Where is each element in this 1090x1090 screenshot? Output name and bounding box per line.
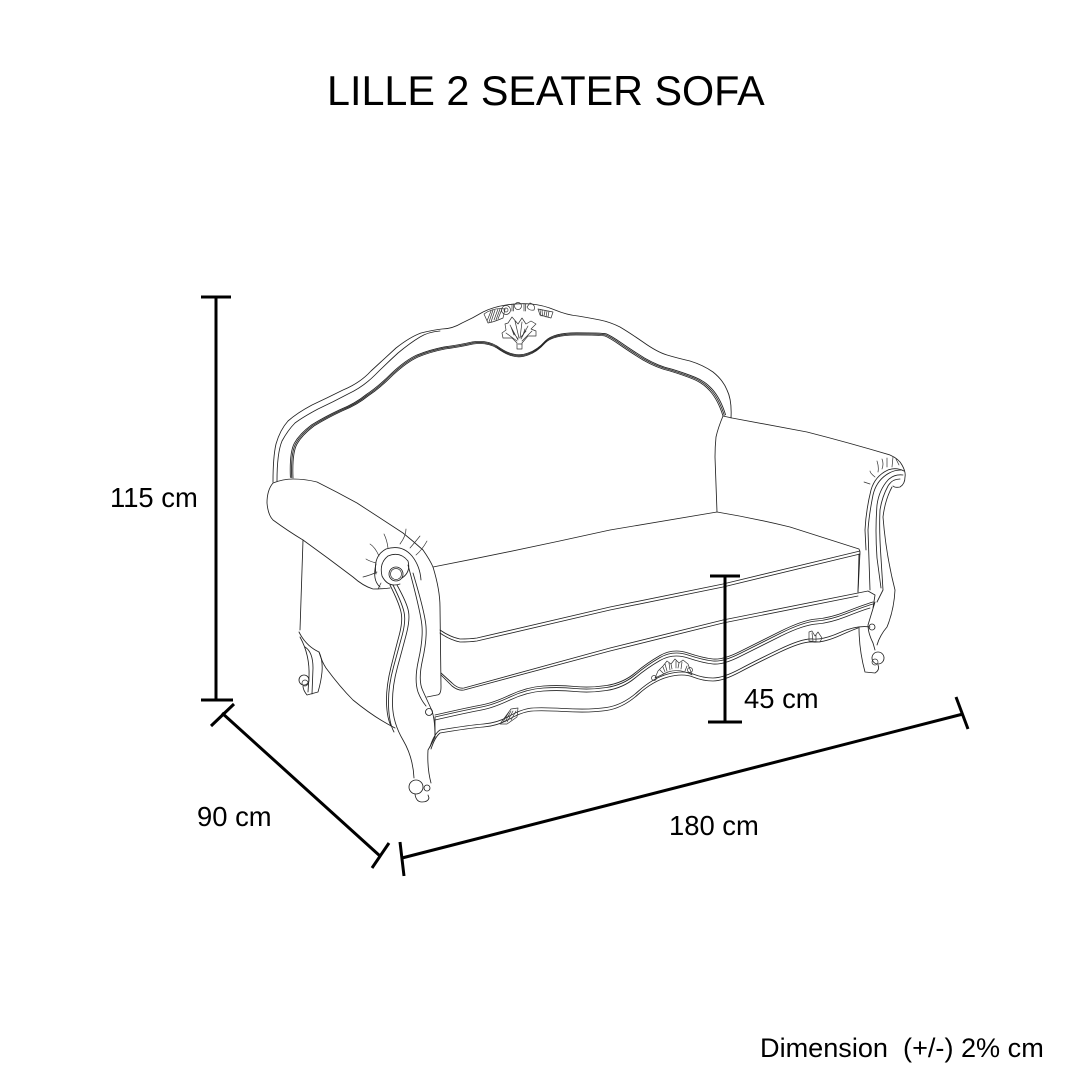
depth dimension: 90 cm: 90 cm <box>197 801 272 832</box>
right armrest <box>715 416 905 512</box>
seat height dimension: 45 cm: 45 cm <box>744 683 819 714</box>
left armrest <box>267 479 717 697</box>
sofa backrest frame <box>273 304 731 482</box>
seat cushion <box>440 512 860 690</box>
tolerance note: Dimension (+/-) 2% cm <box>760 1032 1044 1063</box>
left side panel and rear leg <box>299 632 395 728</box>
front left leg <box>386 565 435 802</box>
sofa line drawing <box>267 302 905 802</box>
front rail <box>430 602 873 749</box>
width dimension: 180 cm: 180 cm <box>669 810 759 841</box>
rail carvings <box>500 631 822 724</box>
seat height dimension: 45 cm <box>708 576 819 722</box>
depth dimension: 90 cm <box>197 704 389 868</box>
armrest scroll <box>363 529 427 589</box>
title: LILLE 2 SEATER SOFA <box>327 68 765 114</box>
height dimension: 115 cm <box>110 297 233 700</box>
height dimension: 115 cm: 115 cm <box>110 482 198 513</box>
crest carving <box>484 302 553 349</box>
width dimension: 180 cm <box>400 697 968 876</box>
right front leg <box>858 469 904 673</box>
